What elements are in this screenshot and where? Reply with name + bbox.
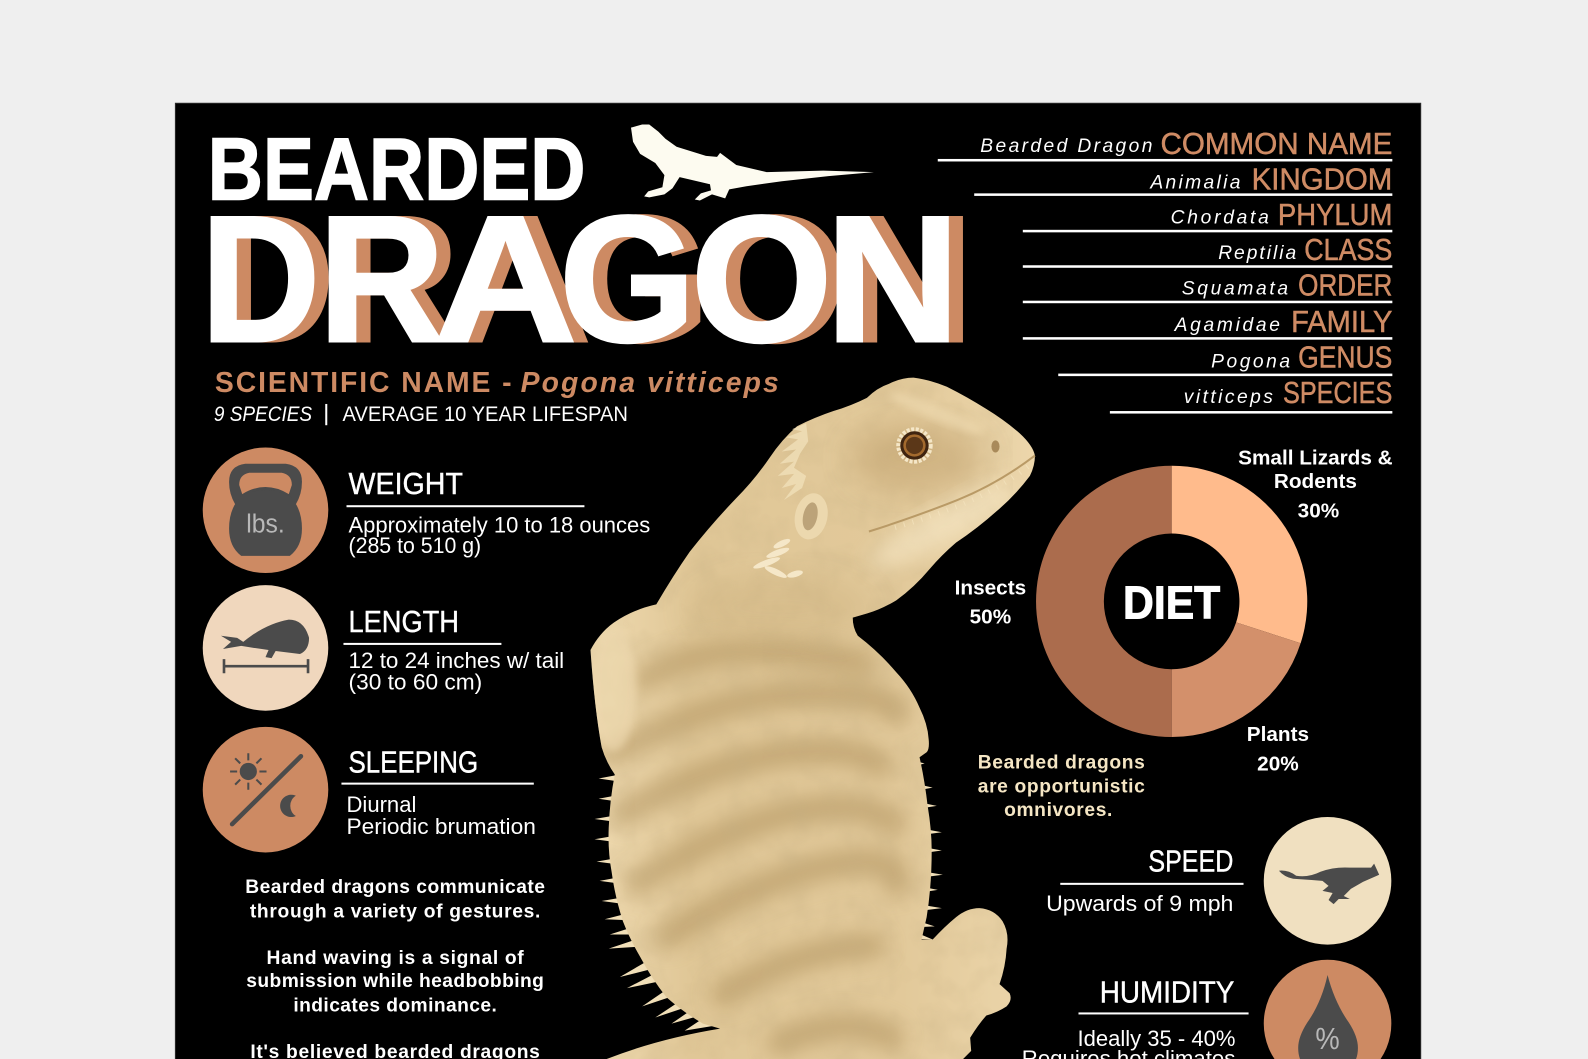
taxonomy list <box>938 126 1392 414</box>
stat: speed: Upwards of 9 mph <box>1046 891 1233 916</box>
head shading <box>850 423 983 492</box>
taxonomy list: FAMILY <box>1291 304 1392 339</box>
stat: length <box>203 585 564 711</box>
chart label: plants: Plants <box>1247 723 1309 746</box>
stat: speed: SPEED <box>1148 846 1233 879</box>
scientific name: Pogona vitticeps <box>521 367 779 399</box>
title white letters: G <box>559 179 696 380</box>
stat: sleeping: Periodic brumation <box>347 814 536 839</box>
icon: running cheetah <box>1264 817 1391 945</box>
mottled skin texture <box>591 648 1003 1027</box>
text block: communication facts <box>245 877 545 1059</box>
stat: speed <box>1046 817 1391 945</box>
stat: sleeping: SLEEPING <box>349 746 478 779</box>
stat: weight <box>203 447 650 573</box>
taxonomy list: SPECIES <box>1283 375 1392 410</box>
species and lifespan: AVERAGE 10 YEAR LIFESPAN <box>342 402 628 426</box>
title white letters: A <box>434 179 577 380</box>
text block: communication facts: Hand waving is a signal of <box>267 948 524 969</box>
taxonomy list: KINGDOM <box>1252 161 1392 196</box>
stat: humidity: Ideally 35 - 40% <box>1077 1026 1235 1051</box>
taxonomy list: Agamidae <box>1174 315 1280 336</box>
stat: humidity: HUMIDITY <box>1100 976 1234 1009</box>
chart label: insects: 50% <box>970 606 1011 629</box>
left shoulder highlight <box>592 626 636 751</box>
text block: omnivores: omnivores. <box>1004 800 1112 821</box>
stat: length: LENGTH <box>349 606 459 639</box>
taxonomy list: Chordata <box>1171 208 1269 229</box>
head crest spikes <box>778 423 808 500</box>
eye <box>898 429 931 462</box>
taxonomy list: Squamata <box>1182 279 1288 300</box>
chart label: plants: 20% <box>1257 752 1299 775</box>
right side spikes <box>902 760 943 951</box>
panel: black poster <box>175 103 1421 1059</box>
body and head <box>591 378 1035 1059</box>
chart label: small lizards and rodents: Small Lizards & <box>1238 447 1393 470</box>
taxonomy list: GENUS <box>1298 340 1392 375</box>
mouth line <box>869 456 1035 532</box>
stat: weight: (285 to 510 g) <box>349 533 481 558</box>
title shadow: R <box>332 179 459 380</box>
text block: omnivores: Bearded dragons <box>978 752 1145 773</box>
icon: kettlebell: lbs. <box>246 509 285 539</box>
scientific name: SCIENTIFIC NAME - <box>215 367 512 399</box>
title white letters <box>201 179 960 380</box>
stat: length: (30 to 60 cm) <box>349 669 482 694</box>
title white letters: N <box>825 179 960 380</box>
chart label: plants <box>1247 723 1309 775</box>
title white letters: D <box>201 179 320 380</box>
stat: weight: Approximately 10 to 18 ounces <box>349 513 650 538</box>
icon: water drop with percent <box>1264 960 1391 1059</box>
stat: weight: WEIGHT <box>349 468 463 501</box>
title shadow: O <box>705 179 847 380</box>
chart label: small lizards and rodents: Rodents <box>1274 470 1357 493</box>
taxonomy list: vitticeps <box>1184 387 1273 408</box>
illustration: bearded dragon <box>587 375 1035 1059</box>
ear <box>791 490 832 542</box>
title white letters: O <box>691 179 832 380</box>
title shadow: G <box>573 179 710 380</box>
title shadow: A <box>448 179 592 380</box>
text block: communication facts: indicates dominance. <box>293 995 497 1016</box>
title: dragon <box>201 179 974 380</box>
species and lifespan: 9 SPECIES <box>214 402 312 426</box>
stat: length: 12 to 24 inches w/ tail <box>349 648 564 673</box>
scientific name <box>215 367 779 399</box>
title white letters: R <box>318 179 445 380</box>
chart label: small lizards and rodents: 30% <box>1298 499 1339 522</box>
title shadow: D <box>215 179 334 380</box>
text block: communication facts: Bearded dragons communicate <box>245 877 545 898</box>
shoulder and neck shading <box>706 582 860 628</box>
icon: lizard silhouette <box>631 125 874 200</box>
stat: humidity <box>1022 960 1391 1059</box>
title shadow: N <box>840 179 974 380</box>
stat: sleeping <box>203 727 536 852</box>
text block: omnivores <box>978 752 1145 821</box>
taxonomy list: PHYLUM <box>1278 197 1392 232</box>
chart label: insects <box>955 576 1026 629</box>
body markings <box>587 375 1022 1059</box>
icon: kettlebell <box>203 447 328 573</box>
taxonomy list: Reptilia <box>1218 243 1296 264</box>
text block: omnivores: are opportunistic <box>978 777 1145 798</box>
taxonomy list: Animalia <box>1149 172 1241 193</box>
title: bearded: BEARDED <box>208 119 585 218</box>
icon: water drop with percent: % <box>1315 1023 1340 1056</box>
text block: communication facts: submission while headbobbing <box>246 971 544 992</box>
chart: diet donut: DIET <box>1123 577 1220 629</box>
stat: sleeping: Diurnal <box>347 792 416 817</box>
left side spikes <box>595 775 715 1031</box>
taxonomy list: Bearded Dragon <box>980 136 1152 157</box>
nostril <box>991 440 1000 453</box>
chart: diet donut <box>1036 466 1307 737</box>
taxonomy list: ORDER <box>1298 268 1392 303</box>
taxonomy list: Pogona <box>1211 352 1290 373</box>
text block: communication facts: through a variety of gestures. <box>250 901 540 922</box>
species and lifespan <box>214 402 628 426</box>
icon: sun and moon <box>203 727 328 852</box>
neck beard spikes <box>752 537 804 580</box>
chart label: small lizards and rodents <box>1238 447 1393 522</box>
taxonomy list: COMMON NAME <box>1160 126 1392 161</box>
title shadow <box>215 179 974 380</box>
icon: fish with ruler <box>203 585 328 711</box>
chart label: insects: Insects <box>955 576 1026 599</box>
taxonomy list: CLASS <box>1304 232 1392 267</box>
